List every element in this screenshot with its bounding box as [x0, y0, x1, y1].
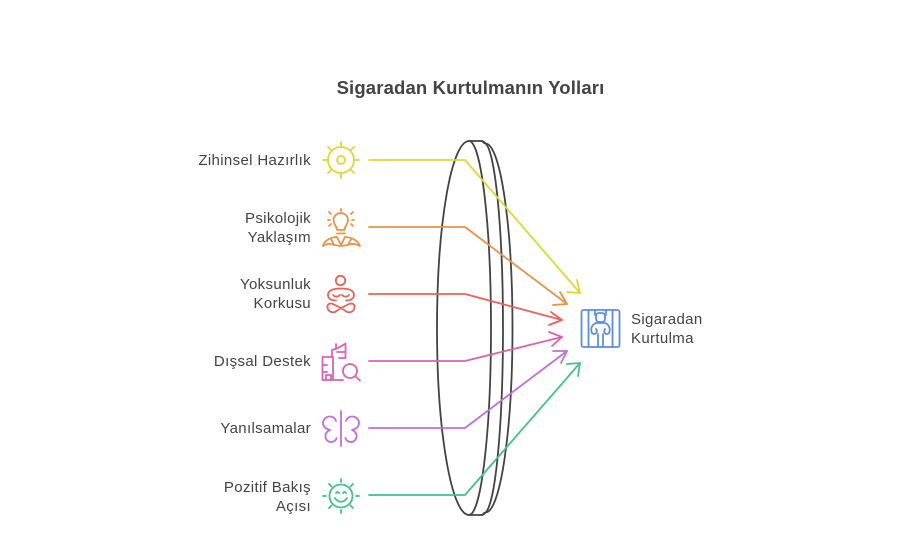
label: Yoksunluk Korkusu: Korkusu [254, 295, 311, 312]
label: Pozitif Bakış Açısı: Pozitif Bakış [224, 479, 311, 496]
icon: smiling sun [323, 479, 359, 513]
arrow: Dışsal Destek [369, 332, 562, 361]
label: Pozitif Bakış Açısı: Açısı [276, 498, 311, 515]
label: Yanılsamalar: Yanılsamalar [220, 420, 311, 437]
label: Sigaradan Kurtulma: Sigaradan [631, 311, 703, 328]
label: Yoksunluk Korkusu: Yoksunluk [240, 276, 311, 293]
title: Sigaradan Kurtulmanın Yolları [337, 77, 604, 98]
label: Psikolojik Yaklaşım: Yaklaşım [248, 229, 311, 246]
arrow: Pozitif Bakış Açısı [369, 363, 580, 495]
icon: prison bars with person [582, 310, 620, 347]
icon: buildings with magnifier [322, 344, 360, 380]
icon: meditating person [327, 276, 355, 312]
label: Dışsal Destek: Dışsal Destek [214, 353, 311, 370]
arrow: Yanılsamalar [369, 351, 567, 428]
icon: sun target [323, 142, 359, 178]
label: Psikolojik Yaklaşım: Psikolojik [245, 210, 311, 227]
icon: lightbulb person [323, 209, 360, 246]
arrow: Psikolojik Yaklaşım [369, 227, 567, 305]
label: Sigaradan Kurtulma: Kurtulma [631, 330, 694, 347]
lens shape [437, 141, 512, 515]
arrow: Zihinsel Hazırlık [369, 160, 580, 293]
label: Zihinsel Hazırlık: Zihinsel Hazırlık [198, 152, 311, 169]
icon: butterfly [323, 411, 359, 446]
arrow: Yoksunluk Korkusu [369, 294, 562, 325]
